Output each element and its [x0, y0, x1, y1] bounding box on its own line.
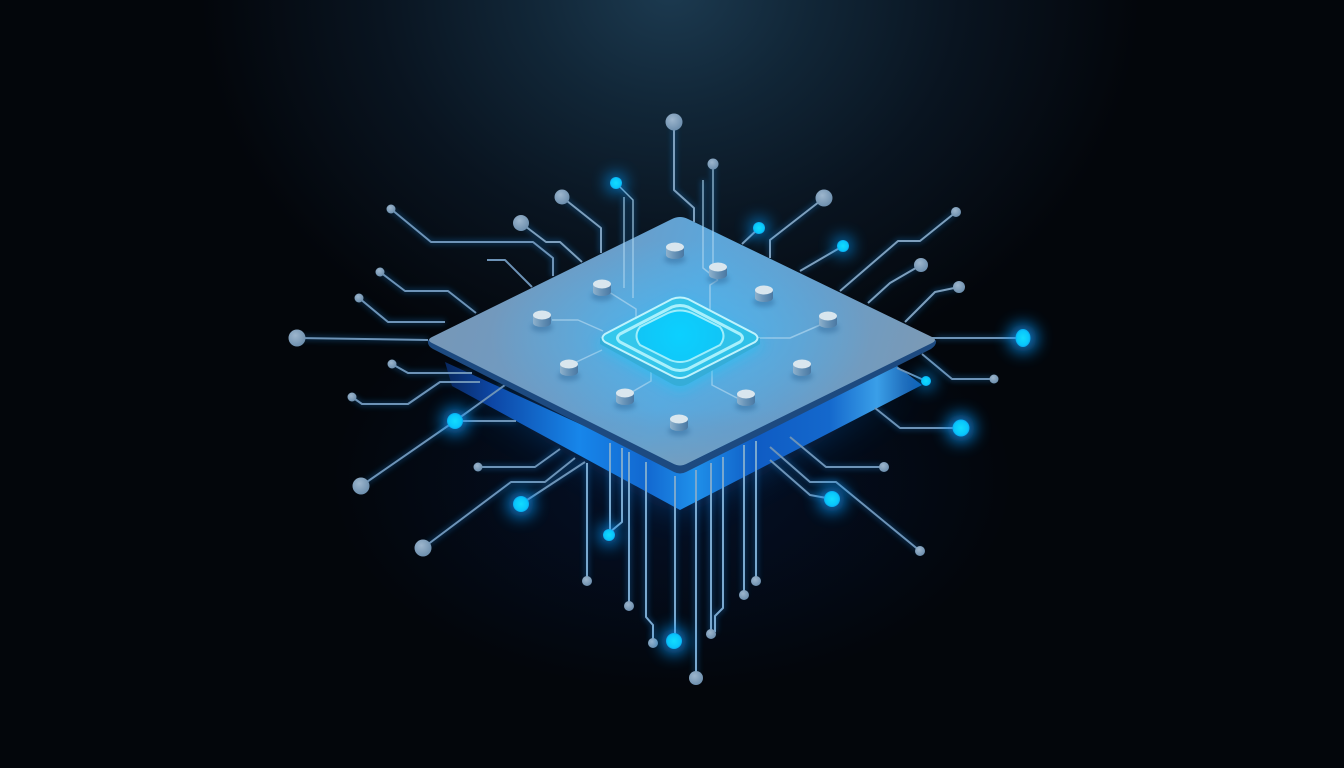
plate sheen: [429, 217, 935, 466]
ambient blue glow under the chip: [0, 280, 1344, 768]
plate dark edge: [428, 340, 936, 474]
surface traces on the plate: [552, 164, 820, 398]
circuit traces glow: [297, 122, 1023, 678]
central processor chip: [596, 298, 764, 392]
chip top: [602, 298, 758, 378]
blue glass underlayer glow: [460, 380, 905, 505]
traces: right side: [770, 338, 1023, 551]
chip glow: [596, 300, 764, 392]
cyan glow halos: [442, 174, 1037, 654]
traces: top side: [521, 122, 959, 322]
traces: bottom side: [587, 441, 756, 678]
main isometric plate: [429, 217, 935, 466]
connector pins: [531, 242, 839, 436]
chip base: [600, 338, 760, 386]
chip core: [636, 310, 724, 362]
chip ring: [618, 306, 742, 370]
gray terminal nodes: [288, 114, 998, 685]
traces: left side: [297, 209, 585, 548]
cyan active nodes: [447, 177, 1030, 649]
blue glass underlayer: [445, 362, 922, 510]
plate bottom highlight: [560, 407, 800, 466]
